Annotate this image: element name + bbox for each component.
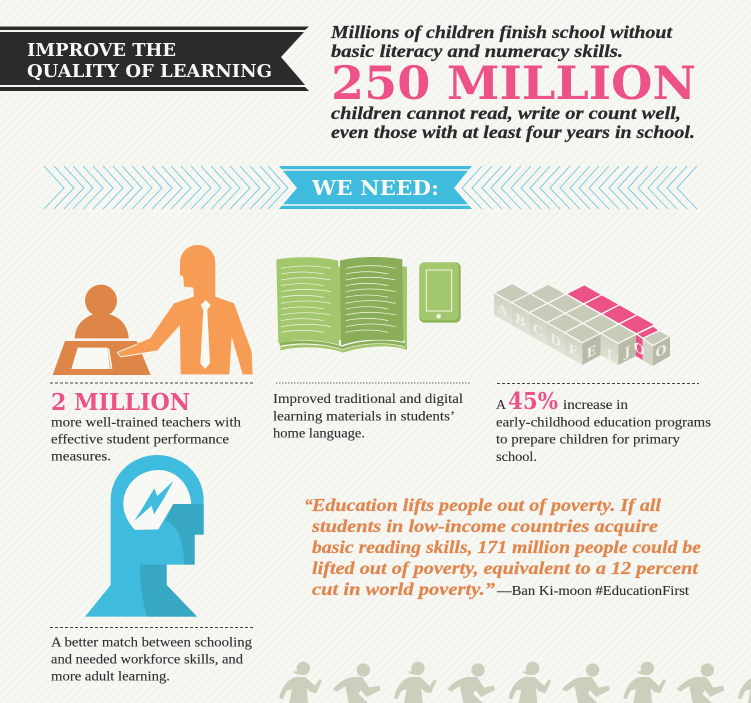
icon: alphabet blocks: B (515, 310, 526, 331)
intro text: 250 million statistic: children cannot read, write or count well, (331, 103, 681, 123)
text: workforce skills (51, 634, 252, 684)
icon: tablet (419, 262, 461, 323)
banner: improve the quality of learning: IMPROVE THE (27, 41, 176, 61)
left chevron band (44, 166, 288, 209)
quote: Ban Ki-moon: “ (304, 495, 313, 515)
text: learning materials: learning materials in students’ (273, 408, 455, 424)
icon: alphabet blocks: D (550, 330, 561, 352)
text: 45 percent increase: to prepare children for primary (496, 432, 680, 446)
icon: alphabet blocks (494, 283, 670, 366)
right chevron band (462, 166, 697, 209)
divider: column two (276, 382, 471, 384)
icon: alphabet blocks: O (655, 341, 667, 362)
text: 2 million teachers: measures. (51, 448, 111, 464)
icon: alphabet blocks: J (623, 343, 630, 362)
text: 2 million teachers: 2 MILLION (51, 389, 190, 416)
icon: alphabet blocks: A (497, 300, 508, 321)
banner: improve the quality of learning (0, 26, 309, 91)
text: workforce skills: A better match between schooling (51, 634, 252, 650)
icon: alphabet blocks: O (634, 339, 645, 360)
text: workforce skills: more adult learning. (51, 668, 170, 684)
quote: Ban Ki-moon: Education lifts people out of poverty. If all (311, 495, 661, 515)
icon: open book (276, 257, 407, 353)
text: 2 million teachers: effective student performance (51, 432, 229, 446)
banner: improve the quality of learning: QUALITY OF LEARNING (27, 62, 272, 82)
text: 2 million teachers (51, 389, 241, 464)
quote: Ban Ki-moon (304, 495, 701, 599)
quote: Ban Ki-moon: lifted out of poverty, equivalent to a 12 percent (312, 558, 699, 578)
text: 45 percent increase: 45% (508, 388, 558, 415)
quote: Ban Ki-moon: cut in world poverty.” (312, 579, 495, 599)
icon: alphabet blocks: E (586, 342, 596, 362)
text: 45 percent increase (496, 388, 711, 464)
icon: teacher and student (53, 245, 253, 375)
divider: column three (497, 382, 699, 384)
divider: column one (50, 382, 253, 384)
text: 45 percent increase: school. (496, 449, 537, 464)
intro text: 250 million statistic: basic literacy and numeracy skills. (331, 41, 623, 61)
text: 45 percent increase: A (496, 397, 506, 412)
icon: head with lightning bolt (85, 455, 204, 617)
text: 45 percent increase: increase in (563, 397, 628, 412)
text: learning materials (273, 391, 463, 440)
intro text: 250 million statistic: Millions of children finish school without (330, 22, 673, 42)
ribbon: we need: WE NEED: (311, 176, 439, 200)
intro text: 250 million statistic: even those with at least four years in school. (331, 122, 695, 142)
icon: alphabet blocks: J (605, 345, 612, 364)
text: workforce skills: and needed workforce skills, and (51, 652, 243, 666)
icon: alphabet blocks: E (569, 341, 578, 361)
quote: Ban Ki-moon: —Ban Ki-moon #EducationFirst (496, 583, 689, 598)
quote: Ban Ki-moon: students in low-income countries acquire (311, 516, 658, 536)
quote: Ban Ki-moon: basic reading skills, 171 million people could be (312, 537, 701, 557)
intro text: 250 million statistic (330, 22, 696, 142)
divider: column four (50, 626, 253, 628)
row of running people (279, 662, 751, 703)
text: learning materials: Improved traditional and digital (273, 391, 463, 406)
icon: alphabet blocks: C (533, 321, 543, 341)
text: 45 percent increase: early-childhood education programs (496, 414, 711, 430)
ribbon: we need (279, 166, 472, 209)
intro text: 250 million statistic: 250 MILLION (331, 56, 696, 110)
text: learning materials: home language. (273, 426, 365, 440)
text: 2 million teachers: more well-trained teachers with (51, 414, 241, 430)
